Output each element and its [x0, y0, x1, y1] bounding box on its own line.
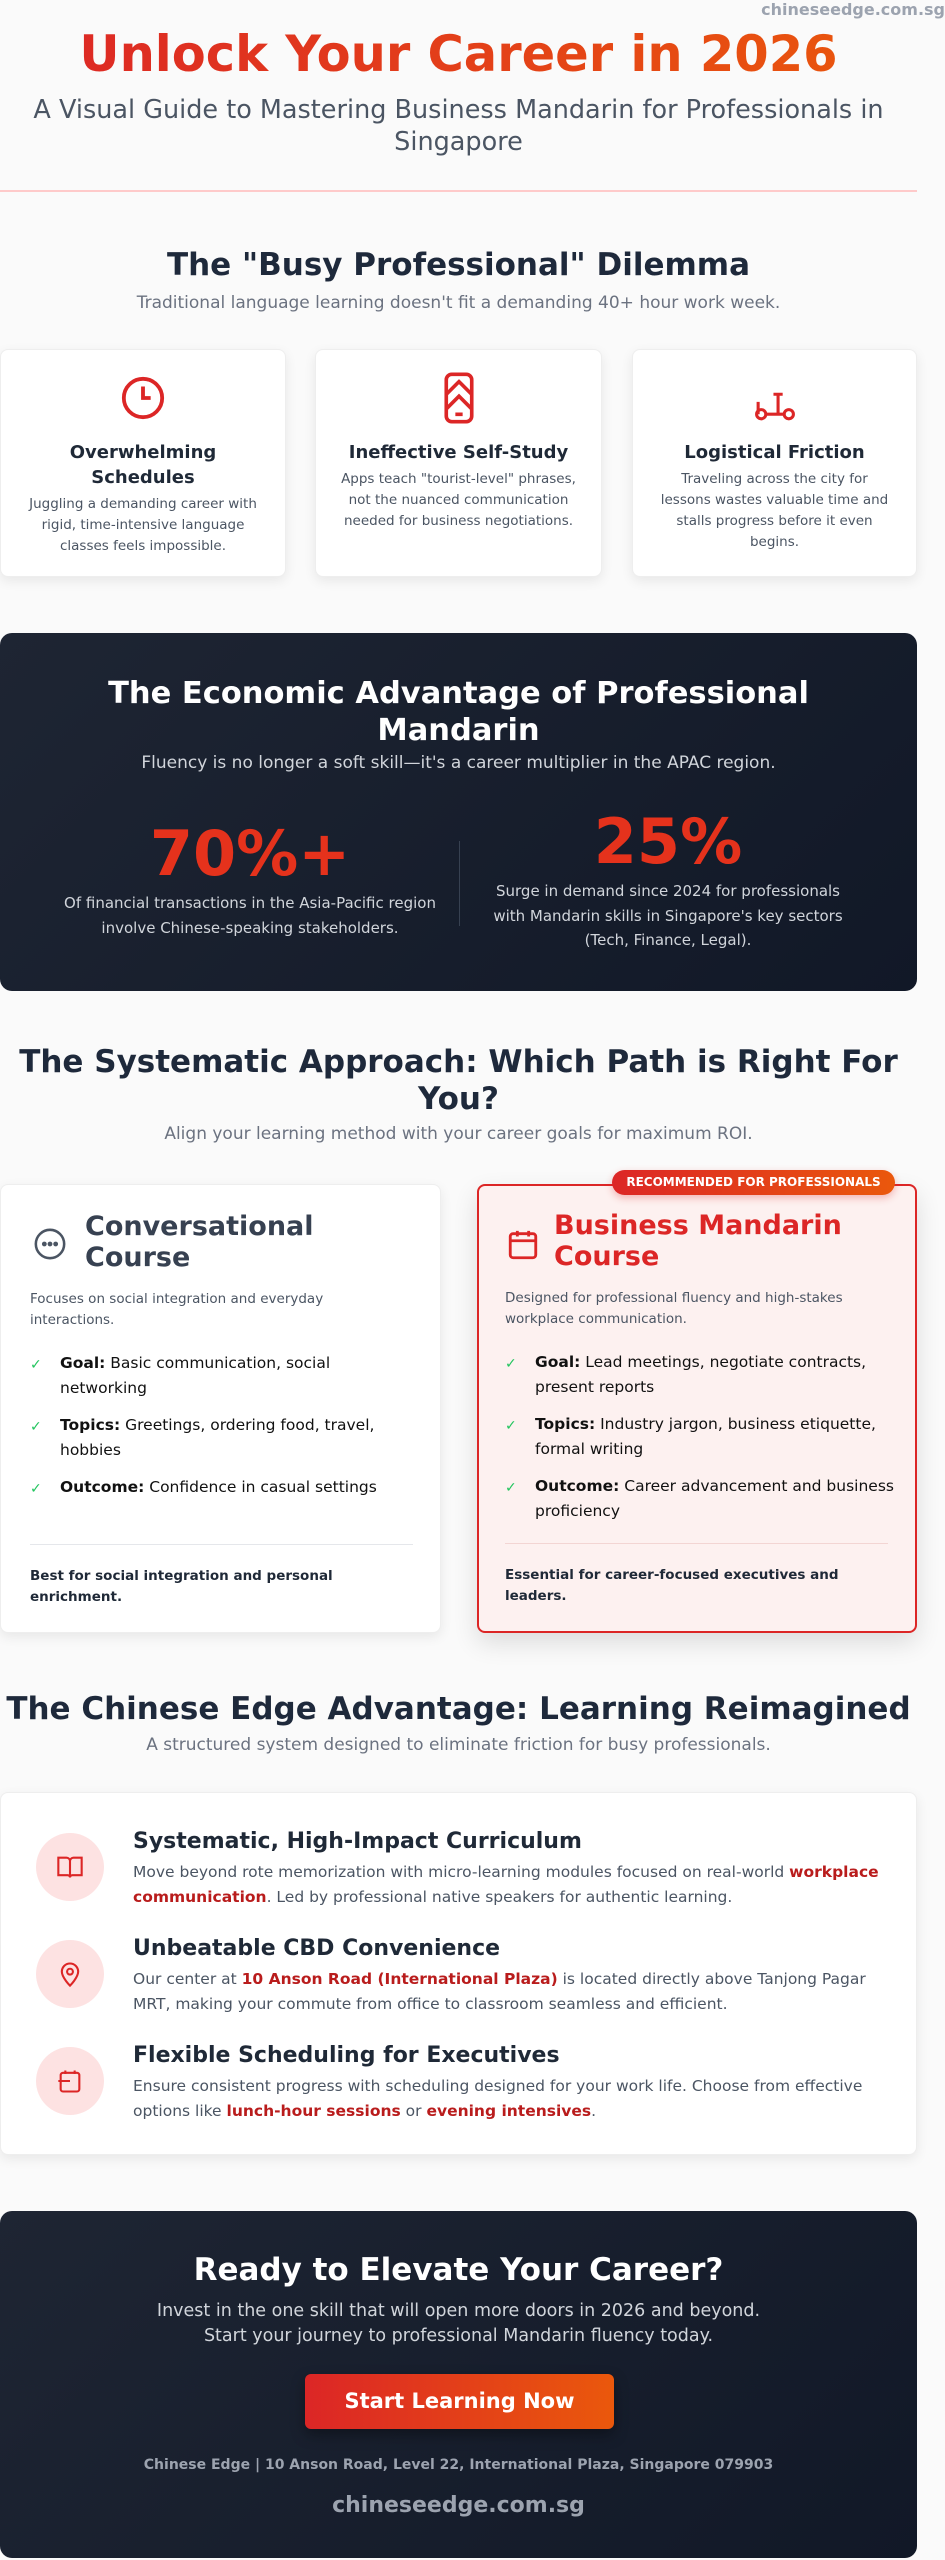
panel: ineffective self-study: Apps teach "tourist-level" phrases, not the nuanced communication needed for business negotiations. [341, 471, 576, 529]
panel: ineffective self-study [315, 349, 602, 577]
button [305, 2374, 614, 2429]
text: Start your journey to professional Mandarin fluency today. [204, 2326, 713, 2346]
icon: calendar [36, 2047, 104, 2115]
heading: Ready to Elevate Your Career? [194, 2252, 723, 2288]
panel: overwhelming schedules: Juggling a demanding career with rigid, time-intensive language classes feels impossible. [29, 496, 257, 554]
section: dilemma subtitle: Traditional language learning doesn't fit a demanding 40+ hour work week. [137, 293, 780, 313]
icon: chat [34, 1228, 66, 1260]
panel: logistical friction [632, 349, 917, 577]
panel: conversational course [0, 1184, 441, 1633]
item: flexible scheduling: Ensure consistent progress with scheduling designed for your work life. Choose from effective options like lunch-hour sessions or evening intensives. [133, 2077, 862, 2120]
icon: phone [444, 372, 474, 424]
bullets [32, 1354, 377, 1496]
panel: logistical friction: Logistical Friction [684, 442, 865, 463]
title: Unlock Your Career in 2026 [79, 25, 838, 83]
badge: recommended [612, 1170, 895, 1195]
heading: The Economic Advantage of Professional Mandarin [108, 676, 809, 748]
icon: book [36, 1833, 104, 1901]
course title: Conversational [85, 1211, 314, 1242]
icon: calendar [508, 1230, 538, 1260]
item: CBD convenience [36, 1936, 866, 2012]
subtitle: A Visual Guide to Mastering Business Mandarin for Professionals in Singapore [33, 95, 884, 157]
item: curriculum: Systematic, High-Impact Curriculum [133, 1829, 582, 1854]
panel: advantages list [0, 1792, 917, 2155]
text [157, 2301, 760, 2346]
bullets: Goal: Lead meetings, negotiate contracts, present reports [535, 1353, 866, 1396]
domain: chineseedge.com.sg [332, 2493, 585, 2518]
icon: scooter [755, 392, 795, 420]
address: Chinese Edge | 10 Anson Road, Level 22, International Plaza, Singapore 079903 [144, 2457, 773, 2473]
stat: 70%: 70%+ [150, 817, 350, 890]
icon: clock [122, 376, 164, 420]
bullets: Outcome: Confidence in casual settings [60, 1478, 377, 1496]
panel: ineffective self-study: Ineffective Self-Study [349, 442, 568, 463]
stat: 70% [64, 817, 436, 936]
item: CBD convenience: Unbeatable CBD Convenience [133, 1936, 500, 1961]
panel: call to action [0, 2211, 917, 2558]
bullets: Goal: Basic communication, social networking [60, 1354, 330, 1396]
course title: Business Mandarin [554, 1210, 842, 1241]
stat: 25%: Surge in demand since 2024 for professionals with Mandarin skills in Singapore's key sectors (Tech, Finance, Legal). [493, 882, 843, 949]
section: advantage heading: The Chinese Edge Advantage: Learning Reimagined [6, 1691, 911, 1727]
stat: 25%: 25% [594, 805, 742, 878]
section: dilemma heading: The "Busy Professional" Dilemma [167, 247, 750, 283]
item: flexible scheduling: Flexible Scheduling for Executives [133, 2043, 560, 2068]
icon: location pin [36, 1940, 104, 2008]
stat: 70%: Of financial transactions in the Asia-Pacific region involve Chinese-speaking stakeholders. [64, 894, 436, 936]
stat: 25% [493, 805, 843, 949]
item: CBD convenience: Our center at 10 Anson Road (International Plaza) is located directly above Tanjong Pagar MRT, making your commute from office to classroom seamless and efficient. [133, 1970, 866, 2012]
section: path subtitle: Align your learning method with your career goals for maximum ROI. [164, 1124, 753, 1144]
bullets: Topics: Industry jargon, business etiquette, formal writing [535, 1415, 876, 1458]
panel: business mandarin course [477, 1184, 917, 1633]
button: Start Learning Now [344, 2389, 575, 2413]
description: Designed for professional fluency and high-stakes workplace communication. [505, 1290, 843, 1326]
course title: Course [554, 1241, 659, 1272]
course title [554, 1210, 842, 1272]
subtitle: Fluency is no longer a soft skill—it's a career multiplier in the APAC region. [141, 753, 776, 773]
footer note: Best for social integration and personal enrichment. [30, 1568, 333, 1605]
section: advantage subtitle: A structured system designed to eliminate friction for busy professionals. [146, 1735, 771, 1755]
description: Focuses on social integration and everyday interactions. [30, 1291, 323, 1328]
panel: economic advantage [0, 633, 917, 991]
bullets: Topics: Greetings, ordering food, travel, hobbies [60, 1416, 374, 1458]
section: path heading: The Systematic Approach: Which Path is Right For You? [19, 1044, 898, 1117]
item: curriculum [36, 1829, 879, 1906]
footer note: Essential for career-focused executives and leaders. [505, 1567, 839, 1604]
item: flexible scheduling [36, 2043, 862, 2120]
panel: logistical friction: Traveling across the city for lessons wastes valuable time and stalls progress before it even begins. [661, 471, 888, 550]
panel: overwhelming schedules [0, 349, 286, 577]
header domain: chineseedge.com.sg [761, 0, 945, 19]
item: curriculum: Move beyond rote memorization with micro-learning modules focused on real-world workplace communication. Led by professional native speakers for authentic learning. [133, 1863, 879, 1906]
text: Invest in the one skill that will open more doors in 2026 and beyond. [157, 2301, 760, 2321]
badge: recommended: RECOMMENDED FOR PROFESSIONALS [626, 1175, 881, 1189]
bullets [507, 1353, 894, 1520]
course title: Course [85, 1242, 190, 1273]
panel: overwhelming schedules: Overwhelming Schedules [70, 442, 216, 488]
bullets: Outcome: Career advancement and business proficiency [535, 1477, 894, 1520]
course title [85, 1211, 314, 1273]
